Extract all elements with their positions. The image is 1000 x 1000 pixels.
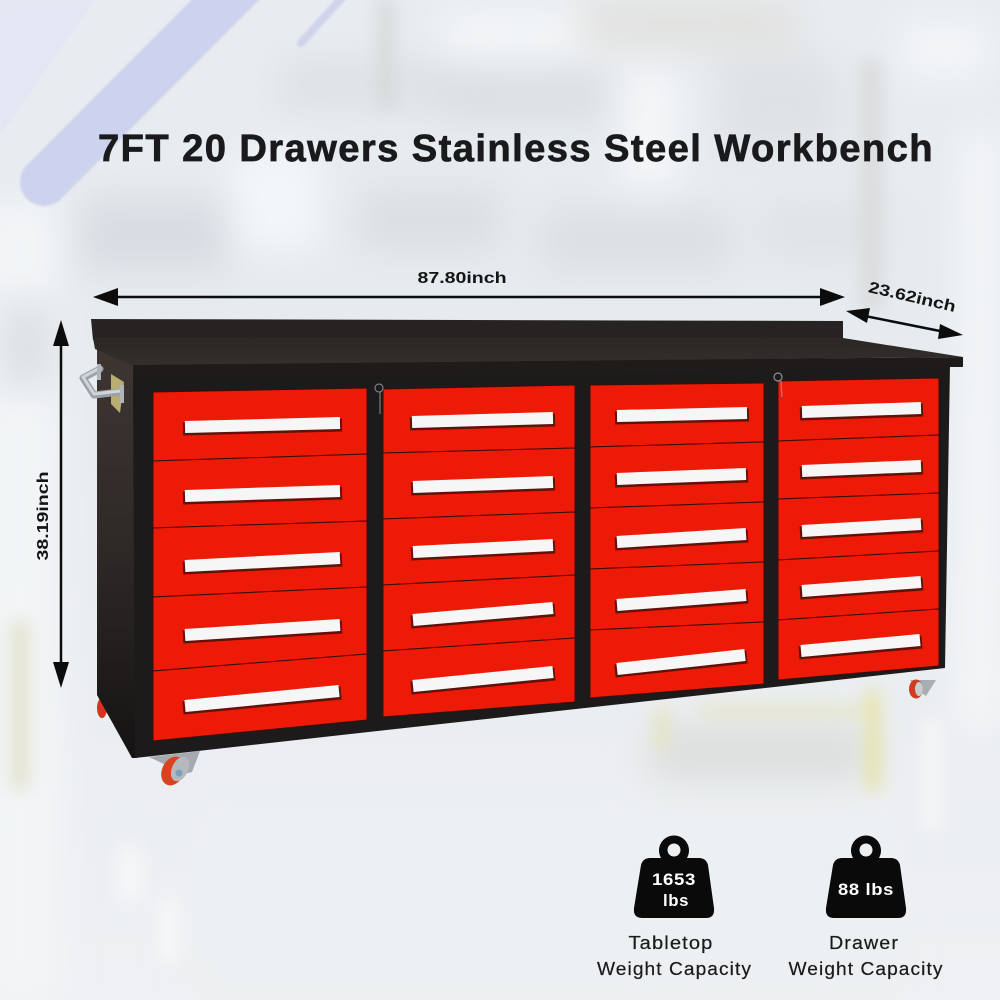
weight icon: tabletop capacity: 1653 <box>652 870 696 889</box>
weight icon: drawer capacity: 88 lbs <box>838 880 894 899</box>
decorative purple diagonal streak <box>0 0 358 182</box>
title: 7FT 20 Drawers Stainless Steel Workbench <box>98 128 934 170</box>
caster: rear right <box>909 680 936 698</box>
drawers column 4 <box>778 378 939 680</box>
tabletop front lip <box>133 357 963 379</box>
dimension: depth: 23.62inch <box>867 279 957 316</box>
drawers column 1 <box>153 388 367 741</box>
backsplash <box>91 319 843 340</box>
caption: tabletop weight capacity <box>597 933 752 979</box>
drawers column 2 <box>383 385 575 717</box>
dimension: depth <box>846 279 963 339</box>
cabinet front frame <box>133 364 950 758</box>
weight icon: drawer capacity <box>826 836 906 918</box>
caster: rear left <box>97 698 107 718</box>
caption: tabletop weight capacity: Tabletop <box>628 933 714 953</box>
dimension: width: 87.80inch <box>418 270 506 287</box>
lock and key: right <box>774 373 782 397</box>
tabletop surface <box>93 338 963 366</box>
caption: drawer weight capacity: Weight Capacity <box>788 959 944 979</box>
lock and key: left <box>375 384 383 414</box>
dimension: height: 38.19inch <box>35 472 52 560</box>
weight icon: tabletop capacity <box>634 836 714 918</box>
side handle <box>83 364 124 413</box>
dimension: height <box>35 320 69 688</box>
caster: front left <box>149 751 200 789</box>
drawer handles <box>185 408 921 706</box>
drawer handles shadows <box>183 410 923 708</box>
drawers column 3 <box>590 383 764 698</box>
dimension: width <box>93 270 845 306</box>
cabinet side panel <box>97 340 137 758</box>
caption: drawer weight capacity <box>788 933 944 979</box>
caption: drawer weight capacity: Drawer <box>829 933 899 953</box>
weight icon: tabletop capacity: lbs <box>663 891 689 910</box>
workbench <box>83 319 963 789</box>
caption: tabletop weight capacity: Weight Capacity <box>597 959 752 979</box>
